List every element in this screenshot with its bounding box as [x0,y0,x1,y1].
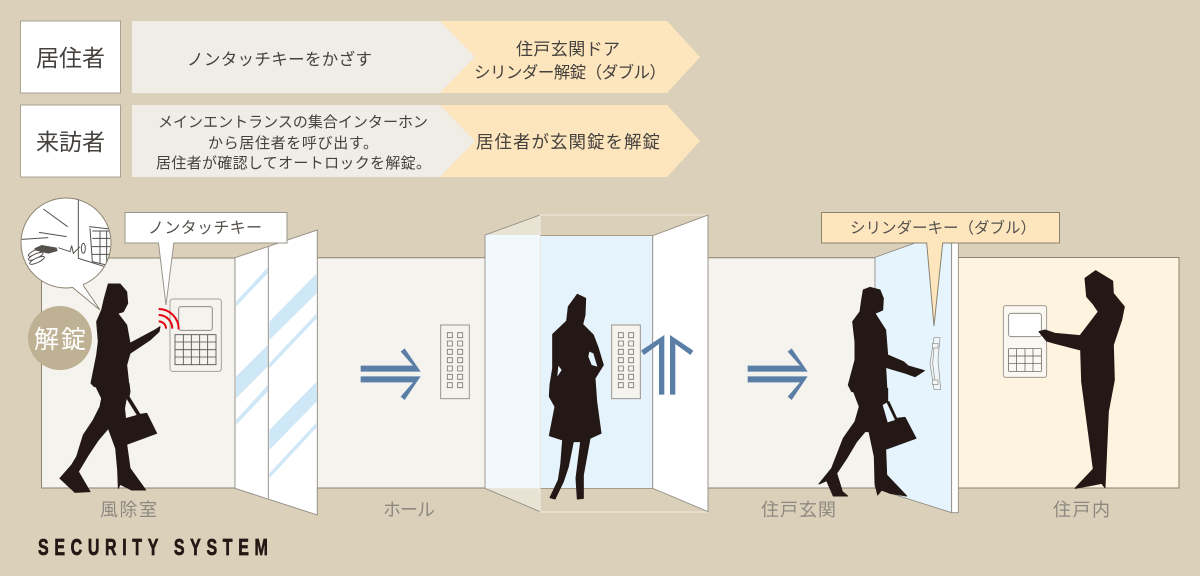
step: cylinder unlock: シリンダー解錠（ダブル） [474,62,666,82]
arrow: to hall [361,348,421,400]
person: resident at door [819,287,924,496]
room label: hall: ホール [383,500,435,520]
person: resident indoors [1039,271,1124,488]
arrow: up [641,335,693,395]
label box: resident: 居住者 [36,45,105,71]
step: cylinder unlock: 住戸玄関ドア [516,40,620,59]
elevator: right door [653,215,708,512]
hall call panel [441,325,469,399]
auto door with glass stripes [235,230,317,515]
callout: non-touch key [125,212,287,305]
step: call via intercom: から居住者を呼び出す。 [208,135,378,152]
title: SECURITY SYSTEM [38,535,268,561]
badge: unlock: 解錠 [34,326,86,354]
person: visitor in elevator [549,294,603,499]
dwelling door [875,230,1047,513]
callout: cylinder key [822,212,1060,326]
callout: non-touch key: ノンタッチキー [148,219,262,237]
step: cylinder unlock [440,21,700,93]
callout: cylinder key: シリンダーキー（ダブル） [850,218,1036,237]
label box: visitor [20,105,120,177]
intercom panel: entrance [170,299,221,371]
room label: windbreak room: 風除室 [100,500,157,520]
intercom panel: dwelling [1003,306,1047,377]
wireless signal icon [159,309,179,329]
room label: interior: 住戸内 [1053,500,1110,520]
step: call via intercom: 居住者が確認してオートロックを解錠。 [156,155,431,172]
person: resident at entrance with key [60,284,160,492]
room: windbreak room [42,258,236,488]
step: resident unlocks [440,105,700,177]
step: call via intercom: メインエントランスの集合インターホン [158,114,428,131]
step: call via intercom [132,105,475,177]
door handle [930,338,941,389]
step: resident unlocks: 居住者が玄関錠を解錠 [476,132,660,152]
row: resident flow [20,21,700,93]
badge: unlock [28,306,92,370]
room: dwelling interior [958,258,1179,488]
room: hall [317,258,486,488]
step: hold non-touch key [132,21,475,93]
elevator: left glass door [485,215,540,512]
inset: key held to reader [21,198,111,310]
room label: entrance: 住戸玄関 [761,500,836,520]
label box: visitor: 来訪者 [36,129,105,155]
elevator call panel [612,325,640,399]
elevator: back wall [540,236,653,488]
row: visitor flow [20,105,700,177]
elevator [485,215,808,512]
step: hold non-touch key: ノンタッチキーをかざす [187,49,372,69]
room: entrance corridor [708,258,876,488]
label box: resident [20,21,120,93]
arrow: to entrance [748,348,808,400]
